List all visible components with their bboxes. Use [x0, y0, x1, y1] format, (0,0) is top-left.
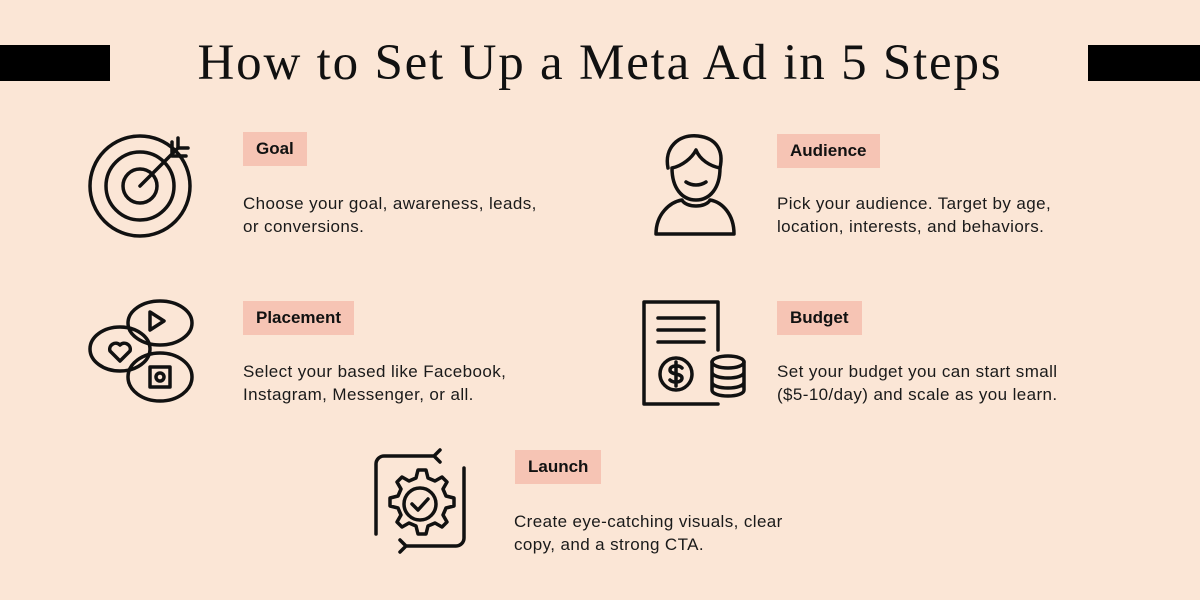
text: Audience — [777, 194, 1051, 236]
tag: Budget: Budget — [790, 308, 849, 327]
text: Launch: copy, and a strong CTA. — [514, 535, 704, 554]
text: Launch: Create eye-catching visuals, clear — [514, 512, 783, 531]
text: Placement: Select your based like Facebook, — [243, 362, 506, 381]
text: Budget — [777, 362, 1058, 404]
right black tape — [1088, 45, 1200, 81]
icon: person — [654, 134, 736, 236]
title: How to Set Up a Meta Ad in 5 Steps — [198, 35, 1002, 91]
tag: Audience — [777, 134, 880, 168]
tag: Placement: Placement — [256, 308, 341, 327]
tag: Goal — [243, 132, 307, 166]
text: Audience: location, interests, and behaviors. — [777, 217, 1044, 236]
icon: gear with arrows — [374, 448, 466, 554]
tag: Launch — [515, 450, 601, 484]
tag: Placement — [243, 301, 354, 335]
icon: budget document with coins — [642, 300, 746, 406]
text: Budget: Set your budget you can start small — [777, 362, 1057, 381]
text: Launch — [514, 512, 783, 554]
tag: Audience: Audience — [790, 141, 867, 160]
icon: chat bubbles — [88, 299, 194, 403]
text: Budget: ($5-10/day) and scale as you learn. — [777, 385, 1058, 404]
tag: Goal: Goal — [256, 139, 294, 158]
text: Placement — [243, 362, 506, 404]
icon: target — [88, 134, 192, 238]
text: Audience: Pick your audience. Target by age, — [777, 194, 1051, 213]
text: Placement: Instagram, Messenger, or all. — [243, 385, 474, 404]
left black tape — [0, 45, 110, 81]
text: Goal: or conversions. — [243, 217, 364, 236]
text: Goal — [243, 194, 537, 236]
tag: Budget — [777, 301, 862, 335]
tag: Launch: Launch — [528, 457, 588, 476]
text: Goal: Choose your goal, awareness, leads, — [243, 194, 537, 213]
